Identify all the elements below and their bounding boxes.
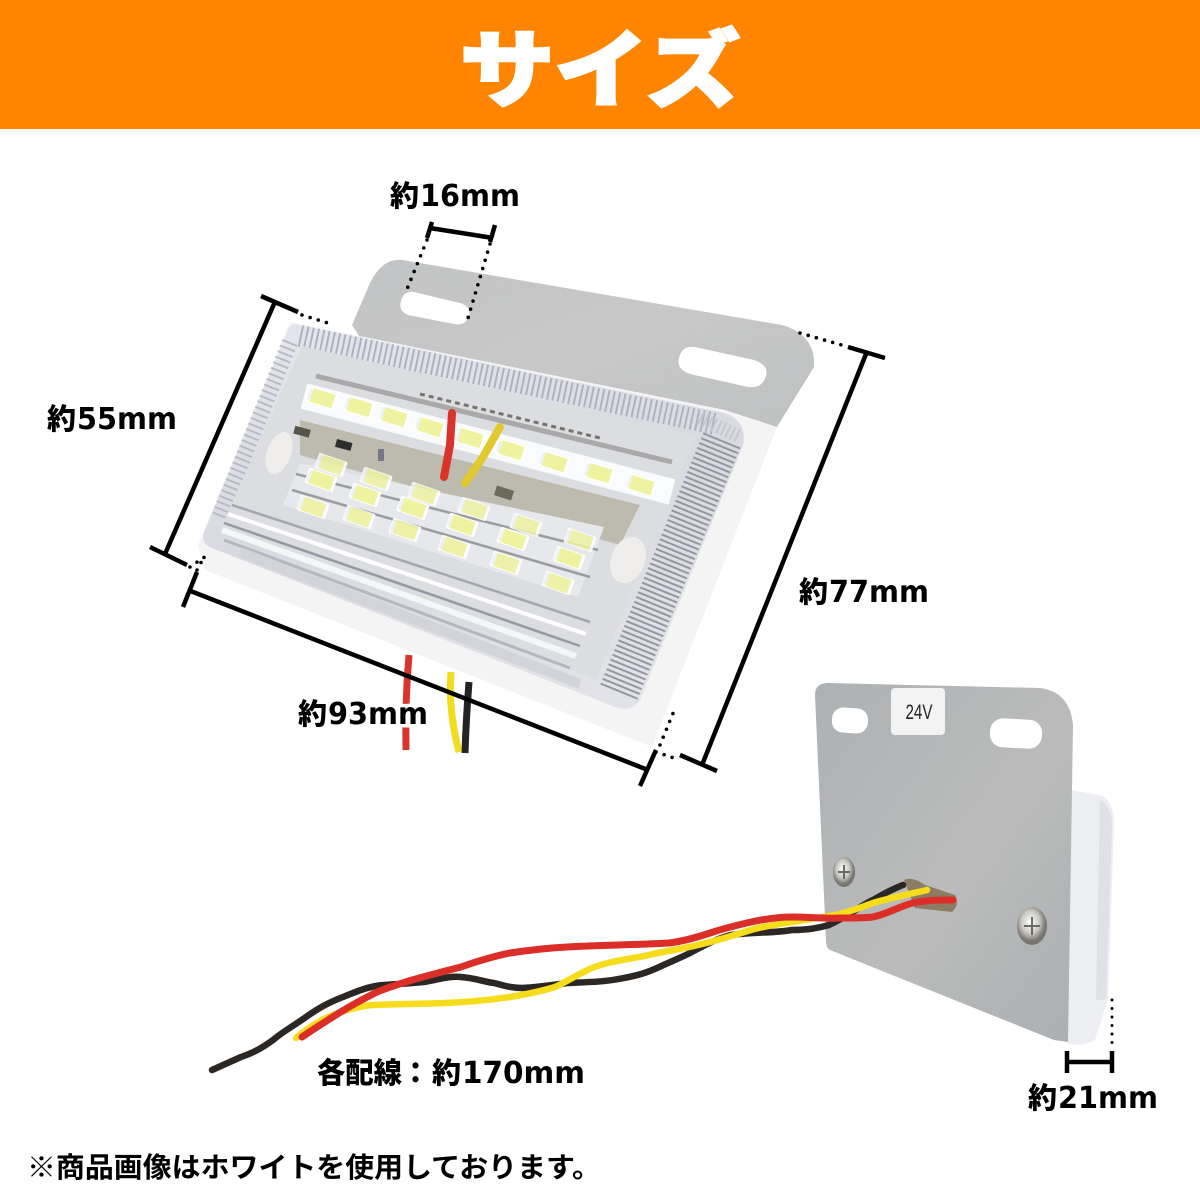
wire exit hole: [904, 879, 957, 912]
dimension: height 77mm: 77mm: [829, 575, 929, 610]
product photo: front view of LED marker lamp: [198, 260, 814, 753]
mounting plate: [352, 260, 814, 440]
dimension: width 93mm: 93mm: [328, 697, 428, 732]
24V label: [891, 688, 945, 735]
24V label: 24V: [906, 701, 932, 724]
dimension: height 77mm: [680, 333, 929, 771]
dimension: height 55mm: 約: [47, 396, 76, 438]
circuit board interior: [222, 346, 696, 680]
dimension: width 93mm: [183, 555, 680, 786]
lower LED rows: [296, 453, 597, 595]
white connectors: [260, 428, 652, 588]
dimension: height 55mm: 55mm: [77, 402, 177, 437]
dimension: width 16mm hole: 16mm: [420, 179, 520, 214]
wires below the lamp: [406, 655, 469, 753]
dimension: wire length 170mm: [317, 1050, 585, 1092]
dimension: width 16mm hole: [390, 173, 520, 318]
dimension: width 93mm: 約: [298, 691, 327, 733]
dimension: depth 21mm: 約: [1028, 1075, 1057, 1117]
dimension: depth 21mm: [1028, 1000, 1158, 1117]
clear lens: [203, 324, 744, 709]
dimension: height 55mm: [47, 296, 328, 567]
lens ribs: [218, 336, 738, 694]
screws: [833, 857, 1047, 945]
dimension: wire length 170mm: 約: [432, 1050, 461, 1092]
twisted wires: [212, 885, 953, 1070]
dimension: height 77mm: 約: [799, 569, 828, 611]
upper LED row: [305, 386, 658, 497]
dimension: depth 21mm: 21mm: [1058, 1081, 1158, 1116]
header band: [0, 0, 1200, 129]
dimension: wire length 170mm: 各配線: [317, 1050, 402, 1092]
white housing side: [1068, 790, 1114, 1044]
title: サイズ: [460, 4, 740, 125]
dimension: width 16mm hole: 約: [390, 173, 419, 215]
white housing base: [198, 322, 777, 747]
product photo: rear view with twisted wires: [212, 683, 1114, 1070]
footnote: ※商品画像はホワイトを使用しております。: [27, 1146, 601, 1186]
small components: [293, 426, 514, 501]
metal plate: [815, 683, 1073, 1042]
lower lens stripes: [222, 505, 590, 684]
raised LED bar: [283, 463, 604, 597]
mounting holes: [831, 707, 1043, 749]
dimension: wire length 170mm: 170mm: [462, 1056, 585, 1091]
internal wires: [444, 413, 500, 483]
dimension: wire length 170mm: ：: [401, 1050, 430, 1092]
